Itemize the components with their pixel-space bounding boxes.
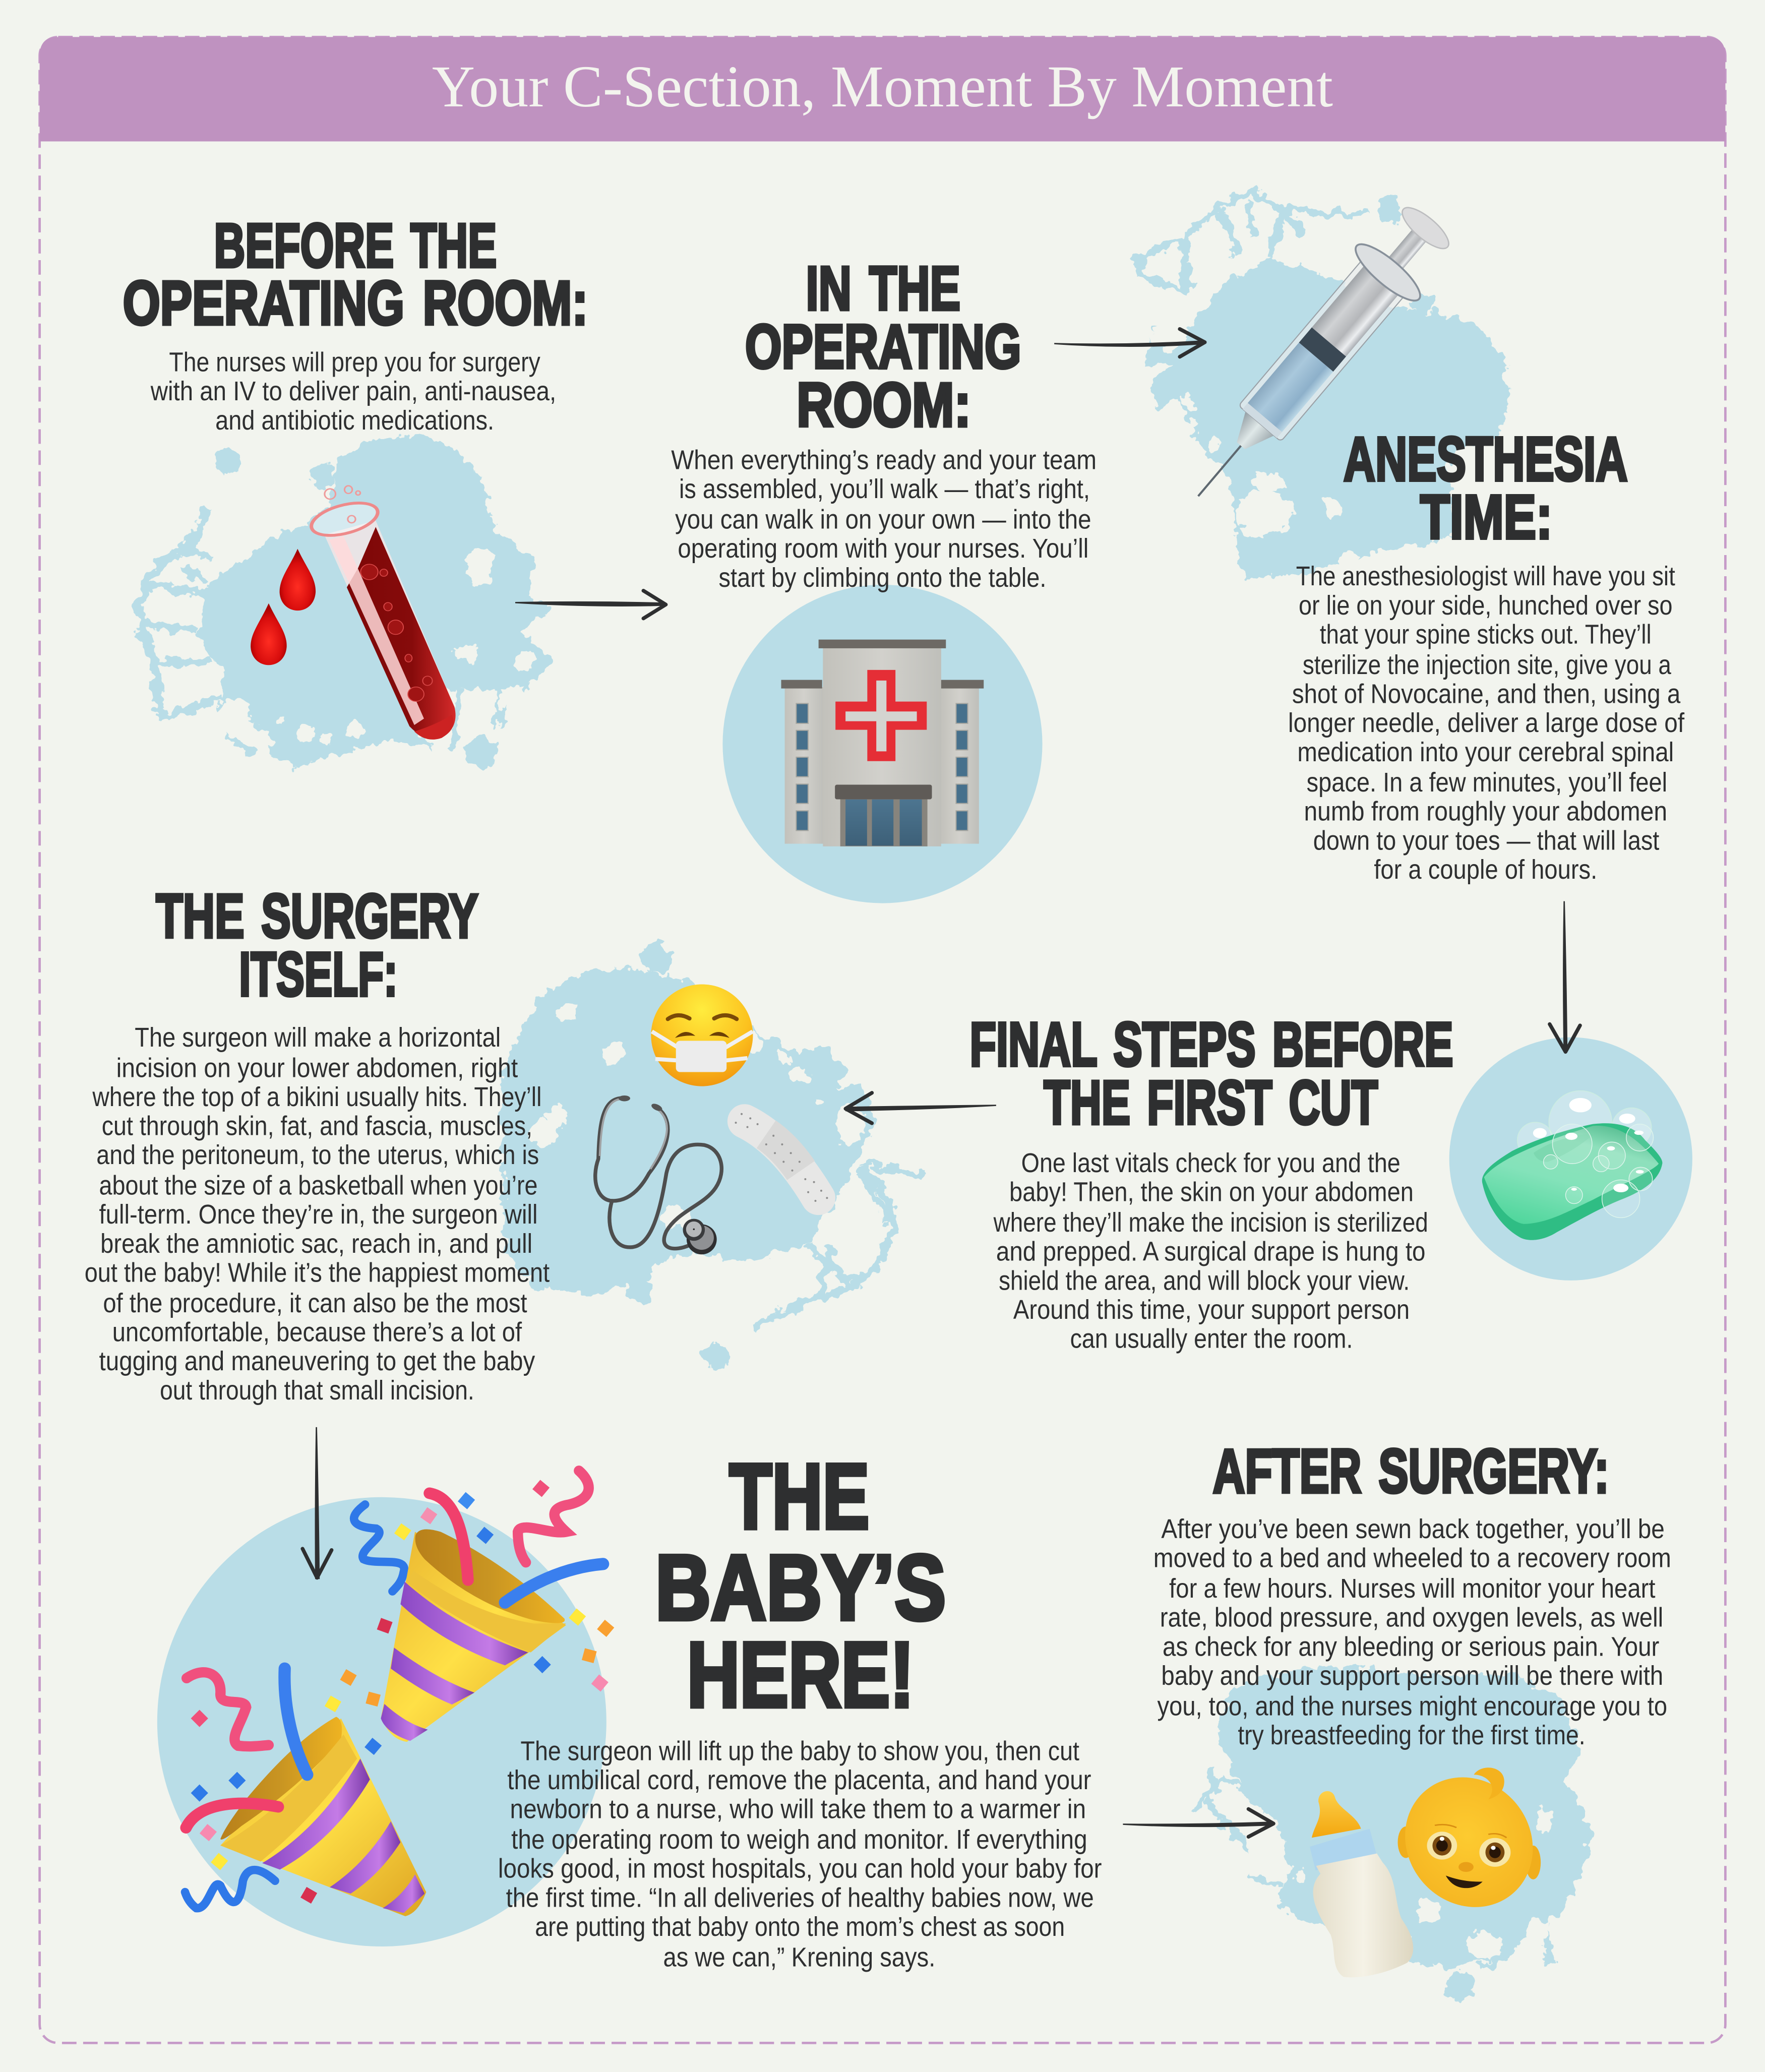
body text: The surgeon will lift up the baby to show you, then cut — [520, 1736, 1079, 1766]
heading: HERE! — [687, 1623, 914, 1726]
icon: party poppers — [185, 1471, 614, 1916]
panel: final steps before the first cut — [969, 1010, 1692, 1354]
panel: before the operating room — [123, 211, 588, 769]
heading: BABY’S — [655, 1536, 946, 1639]
body text: and the peritoneum, to the uterus, which is — [96, 1140, 539, 1170]
panel: the surgery itself — [85, 882, 924, 1406]
heading — [156, 882, 478, 1009]
body text: baby and your support person will be there with — [1161, 1661, 1663, 1691]
splatter: blue ink behind test tube — [139, 436, 554, 769]
heading — [969, 1010, 1453, 1137]
heading: ANESTHESIA — [1344, 424, 1627, 494]
confetti — [191, 1480, 614, 1904]
body text: sterilize the injection site, give you a — [1303, 650, 1671, 680]
splatter: blue ink behind surgical icons — [502, 942, 924, 1370]
body text: incision on your lower abdomen, right — [116, 1053, 518, 1083]
icon: face with medical mask — [651, 984, 753, 1086]
body text: the umbilical cord, remove the placenta, and hand your — [507, 1765, 1091, 1795]
body text: shot of Novocaine, and then, using a — [1292, 679, 1680, 709]
heading: FINAL STEPS BEFORE — [969, 1010, 1453, 1079]
arrow: surgery to baby's here — [302, 1427, 332, 1579]
body text: out the baby! While it’s the happiest moment — [85, 1258, 550, 1288]
body text — [1153, 1514, 1671, 1750]
body text — [1288, 561, 1684, 885]
heading — [745, 254, 1021, 440]
heading: AFTER SURGERY: — [1213, 1437, 1609, 1506]
body text: you, too, and the nurses might encourage you to — [1158, 1691, 1667, 1721]
header banner — [40, 37, 1725, 141]
body text: the first time. “In all deliveries of healthy babies now, we — [506, 1882, 1094, 1913]
body text: cut through skin, fat, and fascia, muscles, — [102, 1111, 532, 1141]
heading: BEFORE THE — [214, 211, 497, 280]
heading — [1344, 424, 1627, 552]
body text: can usually enter the room. — [1070, 1324, 1353, 1354]
body text: uncomfortable, because there’s a lot of — [112, 1317, 522, 1347]
body text: about the size of a basketball when you’re — [99, 1171, 538, 1201]
heading: TIME: — [1420, 482, 1552, 552]
title: Your C-Section, Moment By Moment — [432, 53, 1333, 119]
body text — [85, 1022, 550, 1406]
body text: you can walk in on your own — into the — [675, 504, 1091, 534]
heading: OPERATING — [745, 312, 1021, 382]
body text — [498, 1736, 1102, 1972]
body text — [150, 347, 556, 436]
heading: IN THE — [806, 254, 960, 324]
icon: baby bottle — [1310, 1791, 1413, 1977]
arrow: final steps to surgery — [845, 1093, 996, 1123]
body text: or lie on your side, hunched over so — [1299, 590, 1673, 621]
panel: after surgery — [1153, 1437, 1671, 2000]
heading: THE SURGERY — [156, 882, 478, 951]
icon: bandage — [735, 1113, 828, 1202]
body text: that your spine sticks out. They’ll — [1320, 620, 1652, 650]
arrow: before room to operating room — [515, 591, 666, 619]
body text: break the amniotic sac, reach in, and pull — [100, 1229, 532, 1259]
heading — [655, 1444, 946, 1726]
heading: THE — [729, 1444, 869, 1548]
body text: Around this time, your support person — [1013, 1295, 1410, 1325]
body text: are putting that baby onto the mom’s chest as soon — [535, 1912, 1065, 1942]
body text: as check for any bleeding or serious pain. Your — [1163, 1631, 1659, 1662]
body text: space. In a few minutes, you’ll feel — [1307, 767, 1667, 798]
icon: baby face — [1392, 1768, 1546, 1915]
body text: After you’ve been sewn back together, you’ll be — [1161, 1514, 1665, 1544]
body text: where the top of a bikini usually hits. They’ll — [92, 1082, 541, 1112]
body text: and prepped. A surgical drape is hung to — [996, 1237, 1426, 1267]
splatter: blue ink behind syringe — [1139, 192, 1508, 580]
body text: operating room with your nurses. You’ll — [678, 533, 1088, 564]
body text: of the procedure, it can also be the most — [103, 1288, 527, 1318]
body text: moved to a bed and wheeled to a recovery room — [1153, 1543, 1671, 1573]
body text: the operating room to weigh and monitor. If everything — [511, 1824, 1087, 1855]
soap circle backdrop — [1449, 1038, 1692, 1281]
body text: The nurses will prep you for surgery — [169, 347, 540, 378]
body text: numb from roughly your abdomen — [1304, 797, 1667, 827]
lower popper — [185, 1669, 426, 1916]
body text: start by climbing onto the table. — [719, 563, 1046, 593]
body text: The anesthesiologist will have you sit — [1296, 561, 1675, 591]
arrow: anesthesia to final steps — [1550, 901, 1580, 1052]
body text: try breastfeeding for the first time. — [1238, 1720, 1586, 1750]
heading: ROOM: — [797, 370, 971, 440]
hospital circle backdrop — [722, 585, 1043, 903]
body text: rate, blood pressure, and oxygen levels, as well — [1160, 1603, 1663, 1633]
body text: medication into your cerebral spinal — [1297, 737, 1674, 767]
body text: and antibiotic medications. — [215, 405, 494, 436]
body text: The surgeon will make a horizontal — [135, 1022, 501, 1053]
heading: OPERATING ROOM: — [123, 268, 588, 338]
panel: anesthesia time — [1139, 192, 1684, 885]
heading: THE FIRST CUT — [1044, 1068, 1378, 1137]
body text: down to your toes — that will last — [1313, 825, 1659, 856]
body text: shield the area, and will block your view. — [999, 1265, 1410, 1296]
body text: When everything’s ready and your team — [671, 445, 1097, 475]
arrow: operating room to anesthesia — [1054, 329, 1205, 357]
body text: where they’ll make the incision is sterilized — [993, 1207, 1428, 1238]
splatter: blue ink behind baby and bottle — [1192, 1664, 1591, 2000]
body text: is assembled, you’ll walk — that’s right, — [679, 474, 1090, 504]
body text: out through that small incision. — [160, 1375, 474, 1406]
body text: looks good, in most hospitals, you can hold your baby for — [498, 1854, 1102, 1884]
icon: blood drops — [251, 549, 316, 665]
body text: full-term. Once they’re in, the surgeon will — [99, 1199, 538, 1230]
heading: ITSELF: — [239, 940, 398, 1009]
body text: for a few hours. Nurses will monitor your heart — [1169, 1573, 1656, 1604]
body text: longer needle, deliver a large dose of — [1288, 708, 1684, 738]
panel: in the operating room — [671, 254, 1097, 903]
heading — [123, 211, 588, 338]
body text — [993, 1148, 1428, 1354]
icon: hospital — [781, 640, 984, 846]
icon: stethoscope — [595, 1095, 721, 1254]
body text: as we can,” Krening says. — [663, 1942, 935, 1972]
body text: baby! Then, the skin on your abdomen — [1009, 1177, 1414, 1207]
body text: with an IV to deliver pain, anti-nausea, — [150, 376, 556, 406]
panel: the baby's here — [157, 1444, 1102, 1972]
upper popper — [354, 1471, 603, 1742]
body text: newborn to a nurse, who will take them to a warmer in — [510, 1794, 1086, 1824]
body text: for a couple of hours. — [1374, 855, 1597, 885]
body text — [671, 445, 1097, 593]
body text: tugging and maneuvering to get the baby — [99, 1346, 535, 1376]
icon: soap — [1482, 1091, 1662, 1240]
body text: One last vitals check for you and the — [1021, 1148, 1401, 1178]
icon: syringe — [1167, 194, 1464, 523]
arrow: baby's here to after surgery — [1123, 1809, 1273, 1837]
party circle backdrop — [157, 1497, 606, 1946]
icon: test tube — [306, 486, 456, 740]
